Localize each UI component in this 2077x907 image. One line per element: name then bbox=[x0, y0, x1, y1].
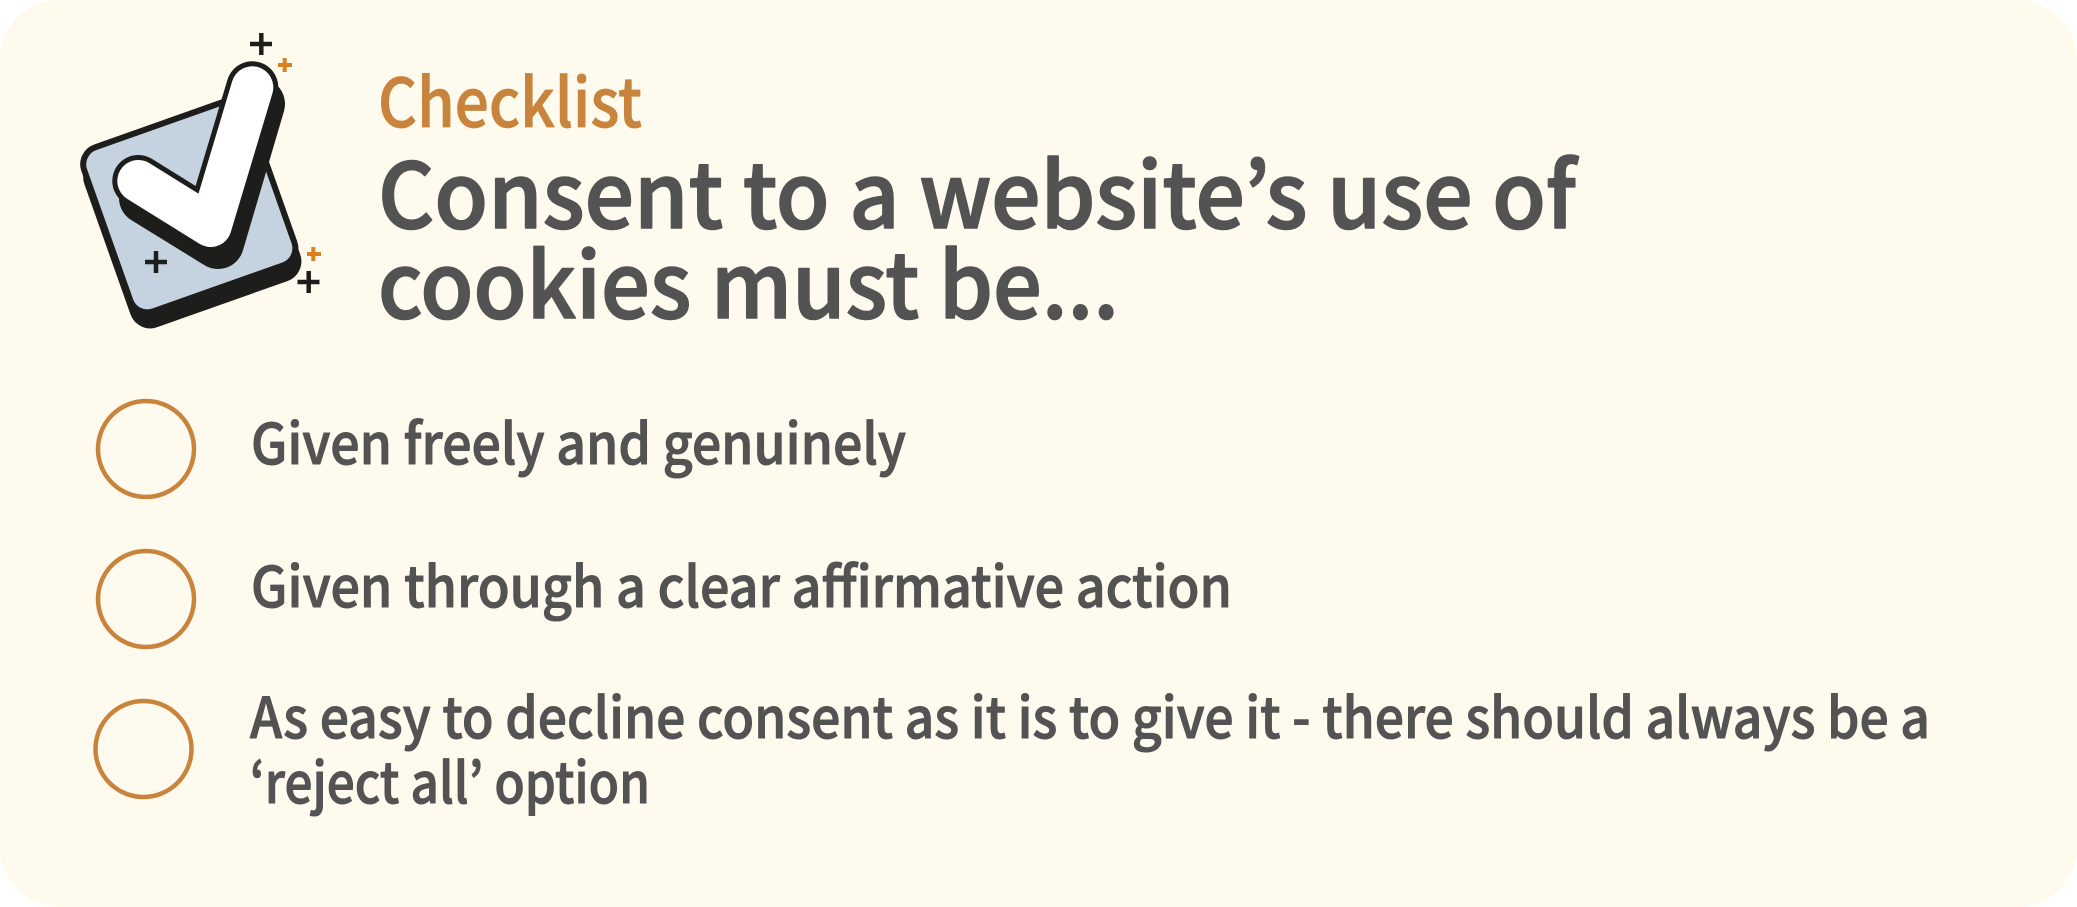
checkbox shadow bbox=[81, 108, 303, 330]
item text: ‘reject all’ option bbox=[250, 739, 650, 820]
item text: Given freely and genuinely bbox=[251, 400, 906, 481]
item text: Given through a clear affirmative action bbox=[251, 543, 1232, 624]
checklist item 1 bbox=[98, 400, 906, 497]
checklist item 3 bbox=[96, 674, 1943, 820]
empty checkbox circle bbox=[96, 701, 192, 797]
tick white bbox=[138, 87, 252, 226]
empty checkbox circle bbox=[98, 401, 194, 497]
empty checkbox circle bbox=[98, 551, 194, 647]
heading: title bbox=[378, 124, 1579, 344]
label: Checklist: Checklist bbox=[378, 50, 642, 147]
icon: tilted checkbox with tick bbox=[78, 33, 321, 330]
tick outline bbox=[138, 87, 252, 226]
heading: title: Consent to a website’s use of bbox=[378, 124, 1579, 254]
heading: title: cookies must be... bbox=[378, 214, 1119, 344]
tick shadow bbox=[145, 104, 259, 243]
sparkle plus signs bbox=[145, 33, 321, 293]
item text: As easy to decline consent as it is to give it - there should always be a bbox=[250, 674, 1930, 755]
checkbox face bbox=[78, 95, 300, 317]
checklist item 2 bbox=[98, 543, 1232, 647]
